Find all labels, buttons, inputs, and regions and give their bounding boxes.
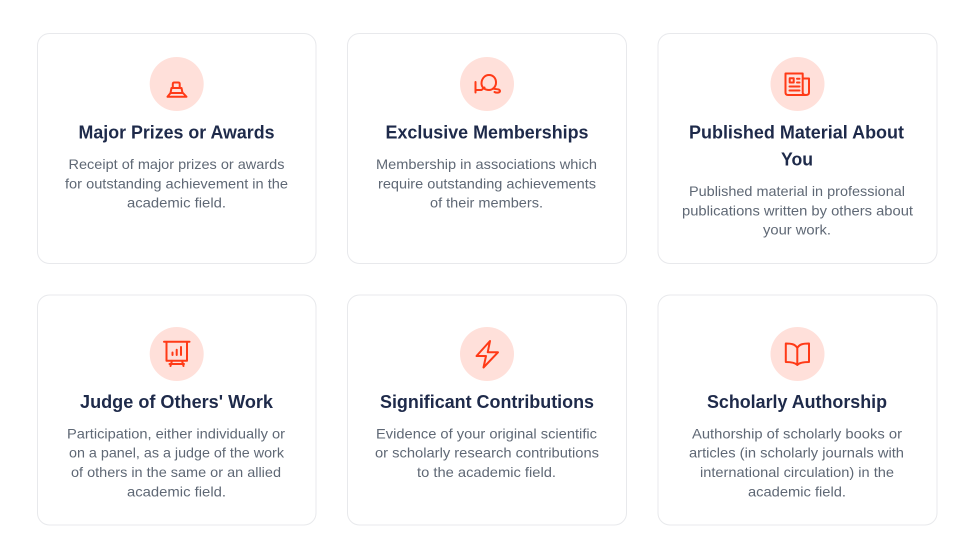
icon: open book [770,327,824,381]
icon: lightning bolt [460,327,514,381]
icon: membership [460,57,514,111]
description [682,183,913,238]
description: Published material in professional [689,183,905,199]
description: your work. [763,222,831,238]
description: for outstanding achievement in the [65,175,288,191]
description: academic field. [127,483,226,499]
panel: judge of others' work [38,295,316,525]
description [689,425,904,499]
panel: major prizes or awards [38,34,316,264]
heading: Scholarly Authorship [707,392,887,412]
description: on a panel, as a judge of the work [69,445,285,461]
description: of their members. [430,195,543,211]
heading: Significant Contributions [380,392,594,412]
description: Authorship of scholarly books or [692,425,902,441]
description: academic field. [127,195,226,211]
heading: Major Prizes or Awards [78,122,274,142]
description [375,425,599,480]
description: or scholarly research contributions [375,445,599,461]
description [376,156,597,211]
panel: exclusive memberships [348,34,626,264]
description: articles (in scholarly journals with [689,445,904,461]
description: of others in the same or an allied [71,464,281,480]
heading: Judge of Others' Work [80,392,274,412]
description: Participation, either individually or [67,425,285,441]
heading: Exclusive Memberships [386,122,588,142]
description: require outstanding achievements [378,175,596,191]
heading: Published Material About [689,122,904,142]
description: publications written by others about [682,202,913,218]
icon: award podium [150,57,204,111]
description [65,156,288,211]
icon: presentation board [150,327,204,381]
description: to the academic field. [417,464,556,480]
description [67,425,285,499]
panel: significant contributions [348,295,626,525]
description: Evidence of your original scientific [376,425,597,441]
panel: scholarly authorship [658,295,937,525]
description: Membership in associations which [376,156,597,172]
description: international circulation) in the [700,464,894,480]
description: academic field. [748,483,846,499]
icon: newspaper [770,57,824,111]
heading: You [781,150,813,170]
panel: published material about you [658,34,937,264]
description: Receipt of major prizes or awards [68,156,284,172]
heading [689,122,904,170]
